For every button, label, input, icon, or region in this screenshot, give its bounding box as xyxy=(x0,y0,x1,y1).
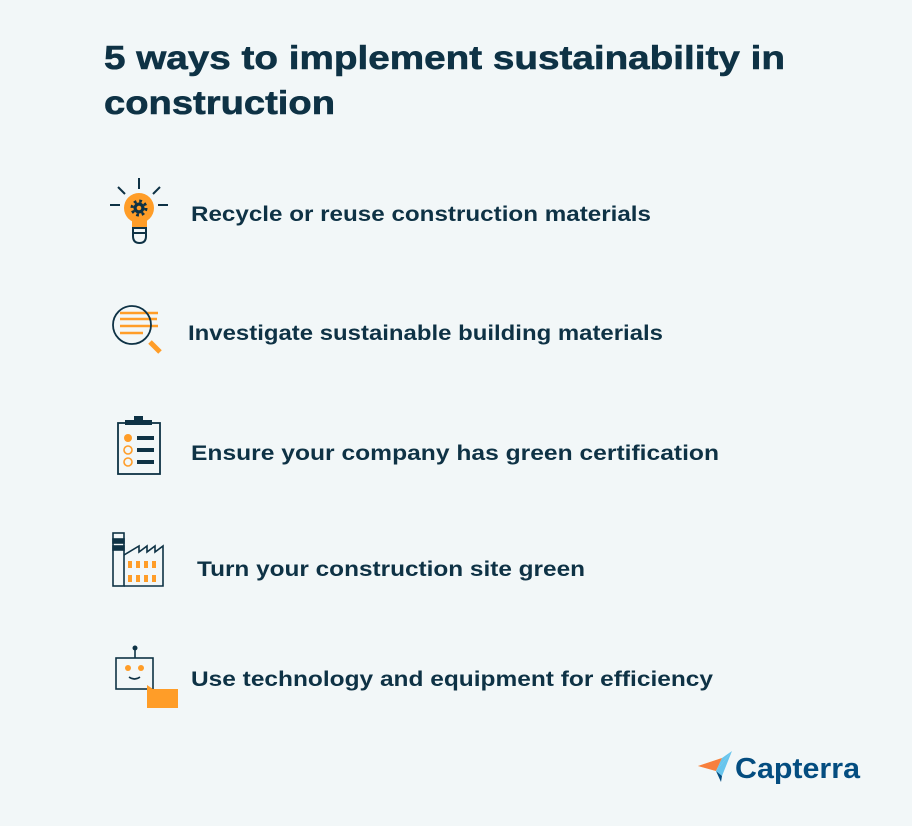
icon: magnifier xyxy=(113,306,160,352)
icon: lightbulb xyxy=(110,178,168,243)
icon: clipboard xyxy=(118,416,160,474)
item 5: technology: Use technology and equipment for efficiency xyxy=(191,668,713,691)
title: 5 ways to implement sustainability in xyxy=(104,39,785,76)
item 1: recycle xyxy=(110,178,651,243)
title xyxy=(104,39,785,121)
logo: Capterra: Capterra xyxy=(735,753,861,785)
item 2: investigate xyxy=(113,306,663,352)
item 3: certification: Ensure your company has green certification xyxy=(191,442,719,465)
title: construction xyxy=(104,84,335,121)
item 1: recycle: Recycle or reuse construction materials xyxy=(191,203,651,226)
item 2: investigate: Investigate sustainable building materials xyxy=(188,322,663,345)
item 3: certification xyxy=(118,416,719,474)
logo: Capterra xyxy=(698,751,861,785)
item 4: site green xyxy=(113,533,585,586)
item 4: site green: Turn your construction site green xyxy=(197,558,585,581)
icon: factory xyxy=(113,533,163,586)
icon: robot xyxy=(116,646,178,708)
item 5: technology xyxy=(116,646,713,708)
